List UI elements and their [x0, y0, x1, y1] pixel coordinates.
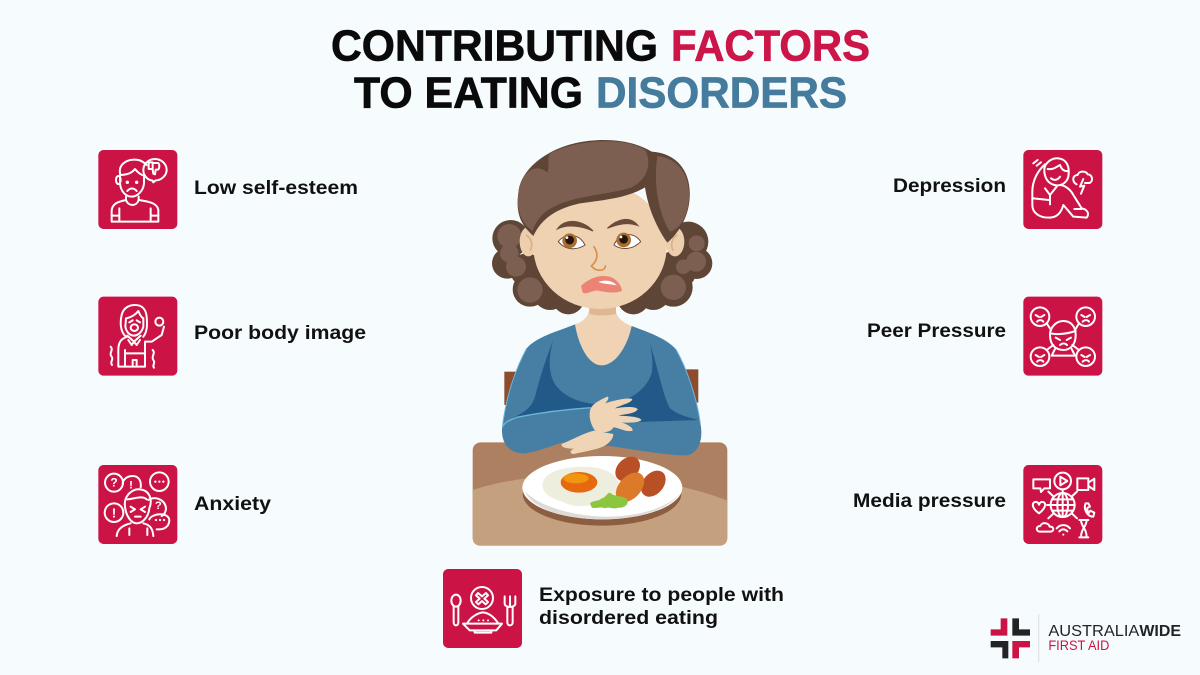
logo wordmark: FIRST AID [1048, 638, 1109, 653]
torso and arms in blue top [502, 324, 701, 455]
neck and neckline [575, 303, 632, 365]
nose [591, 247, 605, 270]
icon: sad person with thumbs down [98, 150, 177, 229]
label: disordered eating [539, 607, 718, 629]
sausages [610, 452, 671, 508]
icon: crying person with raised fist [98, 297, 177, 376]
title: FACTORS [671, 22, 870, 70]
table [473, 442, 727, 546]
icon: anxious person with question marks: ? [110, 476, 118, 490]
label: Media pressure [853, 490, 1006, 512]
eyes [558, 233, 641, 249]
plate of food [522, 452, 682, 526]
item: depression [893, 150, 1102, 229]
label: Depression [893, 175, 1006, 197]
icon: person surrounded by angry faces [1023, 297, 1102, 376]
fried egg [543, 467, 619, 506]
ears [520, 227, 684, 256]
hair top [518, 140, 690, 243]
hands [562, 397, 641, 454]
item: peer pressure [867, 297, 1102, 376]
item: low self-esteem [98, 150, 358, 229]
logo mark: cross [991, 618, 1030, 658]
icon: globe with media symbols [1023, 465, 1102, 544]
item: poor body image [98, 297, 366, 376]
label: Anxiety [194, 493, 271, 515]
mouth [581, 276, 622, 293]
icon: anxious person with question marks: ! [112, 505, 116, 520]
logo wordmark: WIDE [1139, 623, 1181, 640]
icon: anxious person with question marks: ! [129, 479, 133, 491]
label: Peer Pressure [867, 320, 1006, 342]
item: media pressure [853, 465, 1102, 544]
illustration: woman at table with plate of food [473, 140, 727, 546]
label: Low self-esteem [194, 177, 358, 199]
label [539, 584, 784, 629]
icon: anxious person with question marks: ? [155, 500, 162, 512]
title: TO EATING [354, 68, 583, 118]
title [331, 22, 870, 118]
logo wordmark [1048, 623, 1181, 653]
icon: plate with cross, spoon and fork [443, 569, 522, 648]
icon: person sitting hugging knees [1023, 150, 1102, 229]
face [533, 184, 667, 316]
title: DISORDERS [596, 68, 847, 118]
label: Exposure to people with [539, 584, 784, 606]
label: Poor body image [194, 322, 366, 344]
logo wordmark: AUSTRALIA [1048, 623, 1140, 640]
greens [590, 493, 628, 508]
item: anxiety [98, 465, 271, 544]
title: CONTRIBUTING [331, 22, 658, 70]
hair curls behind head [492, 220, 712, 314]
chair back [504, 369, 698, 405]
item: exposure to people with disordered eating [443, 569, 784, 648]
logo: Australia Wide First Aid [991, 614, 1181, 662]
icon: anxious person with question marks [98, 465, 177, 544]
eyebrows [557, 219, 638, 231]
